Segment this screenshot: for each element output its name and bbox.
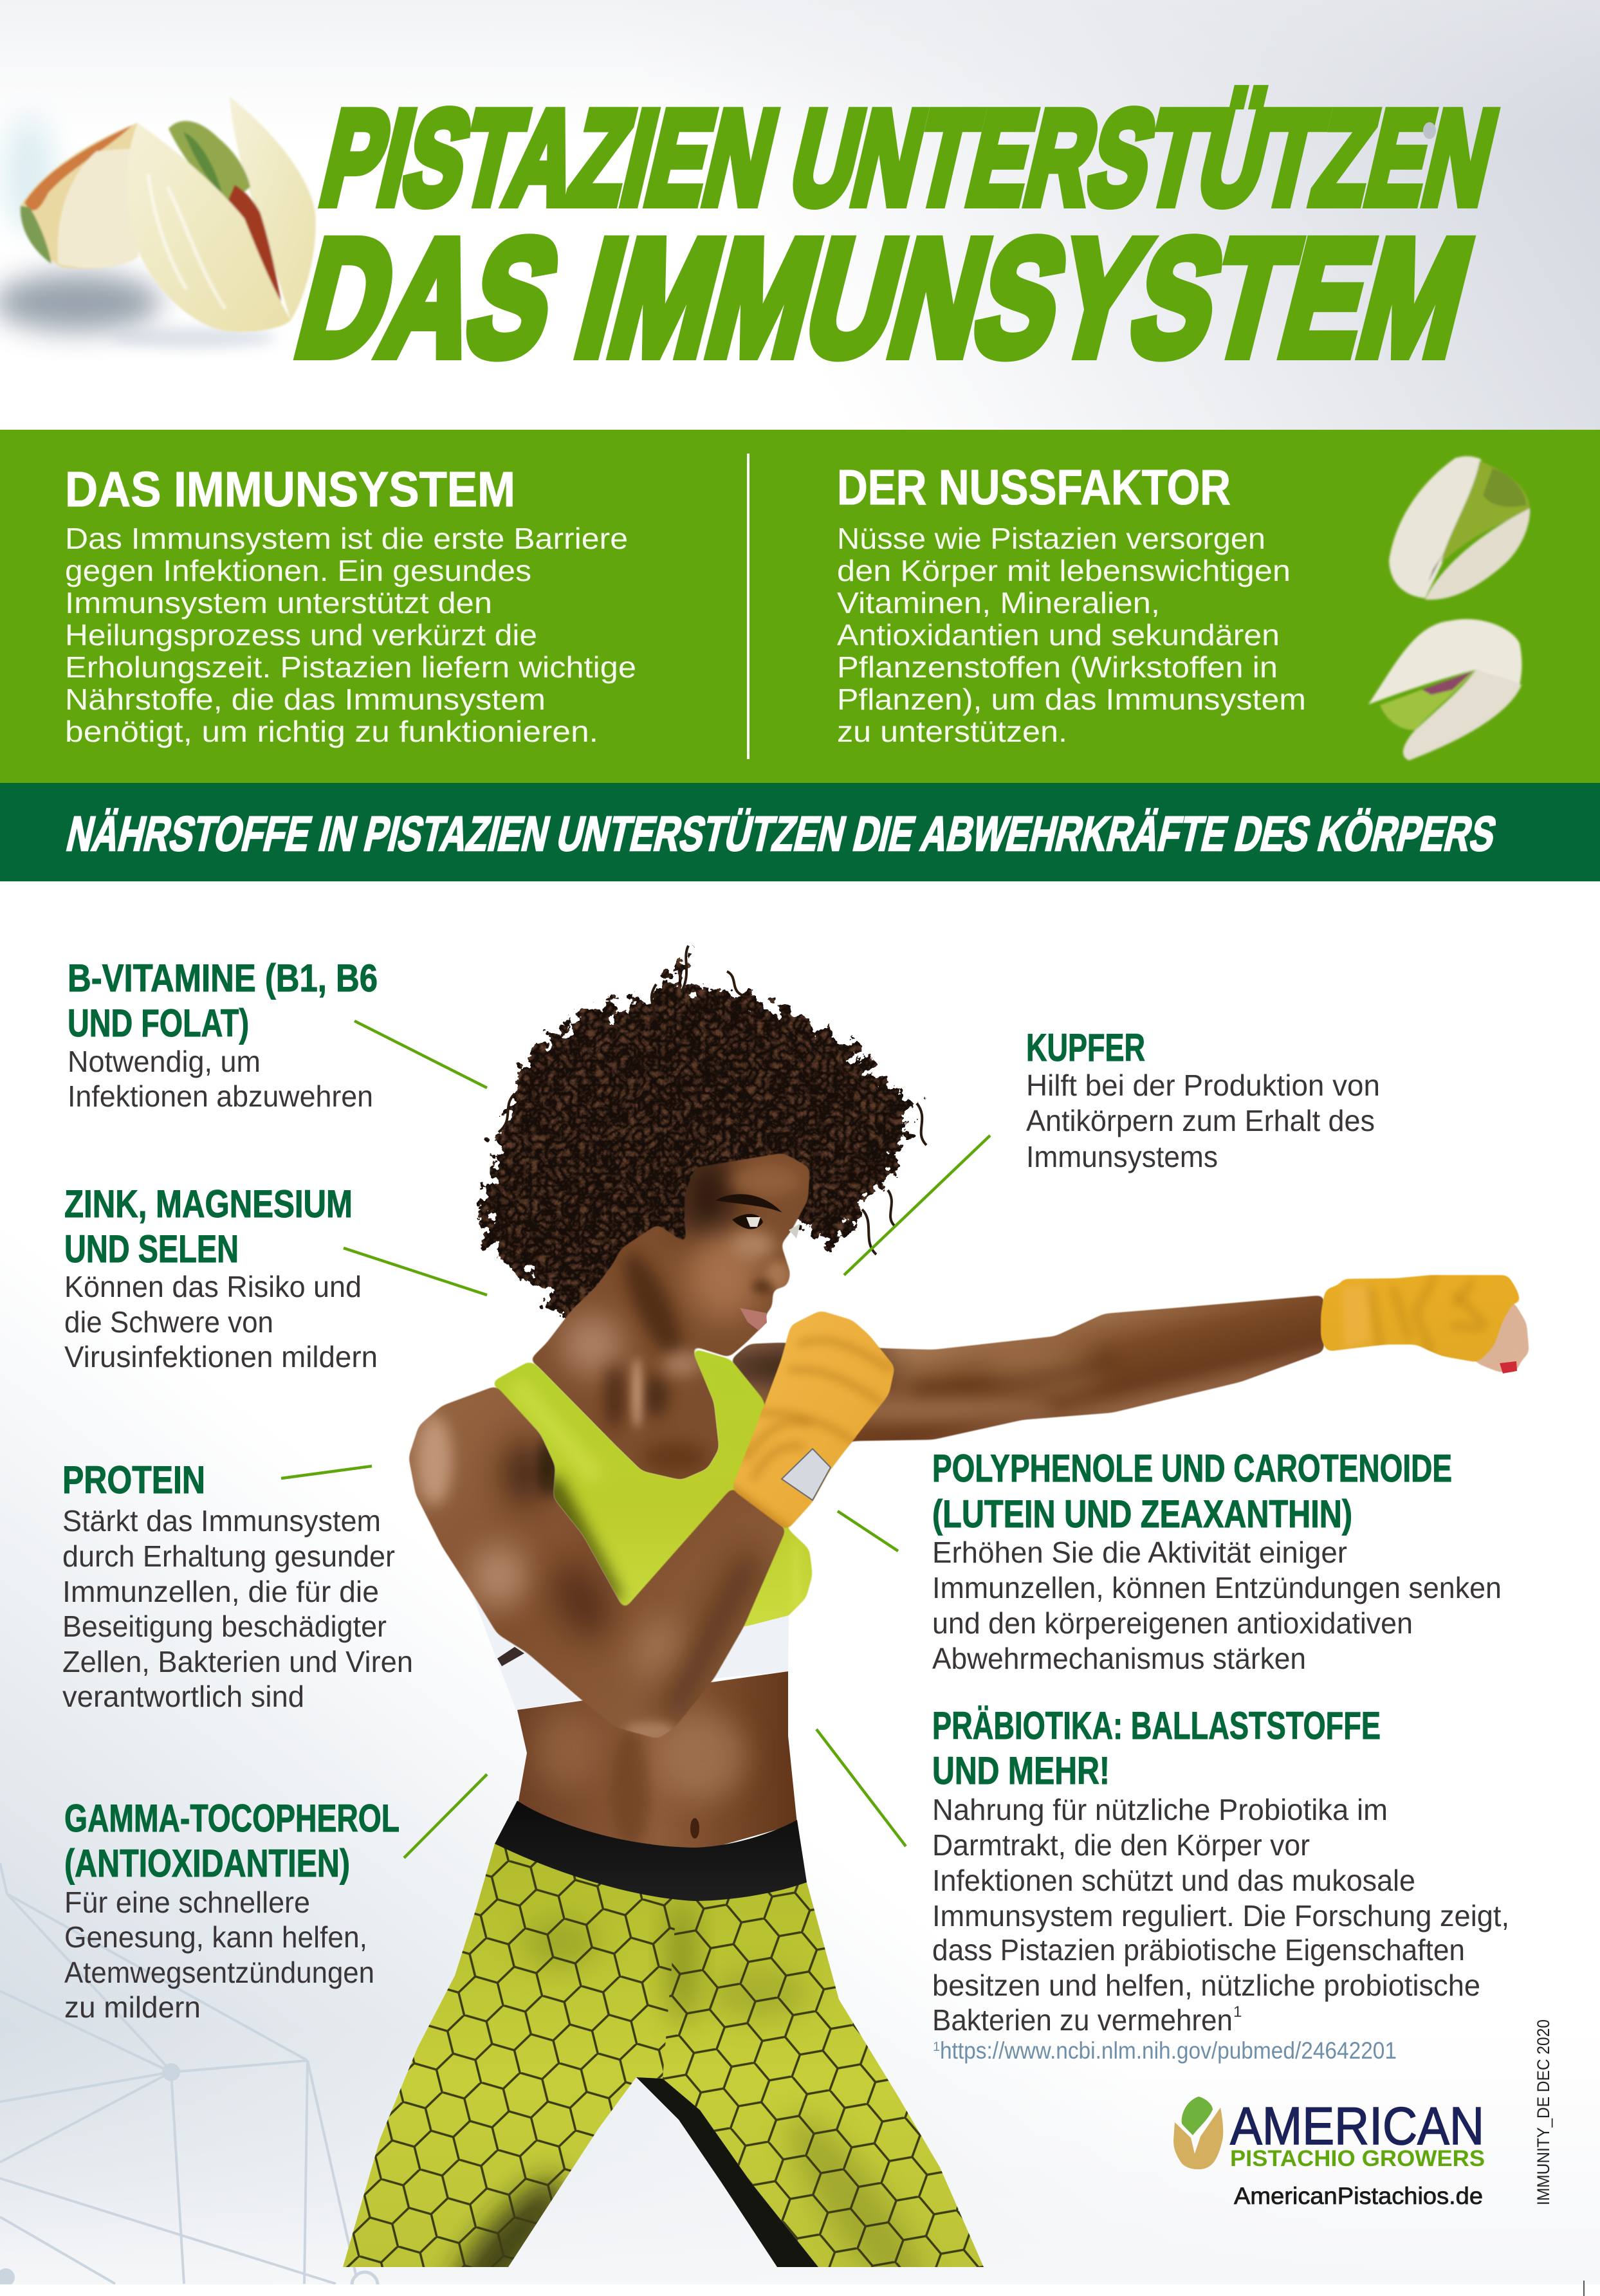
callout: Präbiotika: Nahrung für nützliche Probiotika im (932, 1793, 1388, 1826)
panel text: Das Immunsystem: gegen Infektionen. Ein gesundes (65, 554, 531, 587)
panel text: Der Nussfaktor: Pflanzen), um das Immunsystem (837, 683, 1306, 716)
callout: Gamma-Tocopherol: Atemwegsentzündungen (64, 1956, 374, 1989)
torso (517, 1671, 797, 1853)
callout: Präbiotika: Infektionen schützt und das mukosale (932, 1864, 1415, 1897)
callout: Gamma-Tocopherol: (ANTIOXIDANTIEN) (64, 1842, 350, 1885)
skin (529, 1152, 810, 1480)
panel text: Das Immunsystem: Erholungszeit. Pistazien liefern wichtige (65, 650, 636, 684)
waistband (495, 1801, 807, 1901)
photo: female boxer (322, 946, 1529, 2296)
callout: Zink, Magnesium und Selen: ZINK, MAGNESIUM (64, 1182, 353, 1226)
guard arm (409, 1386, 786, 1740)
leader lines (281, 1021, 990, 1858)
callout: Kupfer (1026, 1026, 1380, 1173)
callout: B-Vitamine: Infektionen abzuwehren (68, 1079, 373, 1113)
callout: Protein (62, 1458, 413, 1713)
fingernail (1500, 1361, 1517, 1373)
callout: Gamma-Tocopherol (64, 1797, 400, 2024)
callout: B-Vitamine: Notwendig, um (68, 1045, 261, 1078)
callout: Präbiotika: dass Pistazien präbiotische Eigenschaften (932, 1933, 1465, 1967)
callout: Zink, Magnesium und Selen (64, 1182, 378, 1373)
callout: Protein: verantwortlich sind (62, 1680, 304, 1713)
panel text: Das Immunsystem: benötigt, um richtig zu funktionieren. (65, 715, 598, 748)
callout: Polyphenole und Carotenoide: Abwehrmechanismus stärken (932, 1642, 1306, 1675)
logo: American Pistachio Growers: AmericanPistachios.de (1234, 2183, 1483, 2209)
callout: Protein: Beseitigung beschädigter (62, 1610, 387, 1643)
callout: Polyphenole und Carotenoide (932, 1447, 1502, 1675)
callout: Protein: Immunzellen, die für die (62, 1575, 379, 1608)
logo: American Pistachio Growers (1173, 2096, 1485, 2209)
callout: Präbiotika: 1 (1233, 2003, 1242, 2021)
pistachio photo: header (0, 96, 316, 348)
callout: Präbiotika: PRÄBIOTIKA: BALLASTSTOFFE (932, 1704, 1381, 1747)
panel text: Der Nussfaktor: Nüsse wie Pistazien versorgen (837, 522, 1265, 555)
icon: pistachio lower (1368, 619, 1522, 760)
inner leg black panel (636, 2077, 818, 2267)
network lines decoration (0, 1863, 378, 2296)
callout: Präbiotika: UND MEHR! (932, 1749, 1110, 1792)
wrap on extended hand (1321, 1275, 1522, 1363)
callout: Präbiotika: Darmtrakt, die den Körper vor (932, 1828, 1310, 1862)
callout: Gamma-Tocopherol: Für eine schnellere (64, 1886, 310, 1919)
title (282, 84, 1509, 390)
callout: Kupfer: Hilft bei der Produktion von (1026, 1069, 1380, 1102)
panel text: Der Nussfaktor: DER NUSSFAKTOR (837, 460, 1231, 515)
logo: American Pistachio Growers: AMERICAN (1230, 2096, 1484, 2156)
wrap on guard hand (732, 1310, 895, 1529)
callout: Zink, Magnesium und Selen: Können das Risiko und (64, 1270, 362, 1303)
panel: green info band (0, 430, 1600, 783)
panel text: Der Nussfaktor: den Körper mit lebenswichtigen (837, 554, 1291, 587)
divider (747, 454, 749, 759)
banner: dark green headline (0, 783, 1600, 881)
callout: B-Vitamine (68, 957, 378, 1113)
callout: Kupfer: KUPFER (1026, 1026, 1145, 1069)
hair (483, 946, 926, 1341)
panel text: Der Nussfaktor: Pflanzenstoffen (Wirkstoffen in (837, 650, 1278, 684)
callout: Kupfer: Antikörpern zum Erhalt des (1026, 1104, 1375, 1137)
callout: Präbiotika: besitzen und helfen, nützliche probiotische (932, 1969, 1480, 2002)
callout: Kupfer: Immunsystems (1026, 1140, 1218, 1173)
panel text: Das Immunsystem: Nährstoffe, die das Immunsystem (65, 683, 546, 716)
footnote: 1 (933, 2040, 940, 2054)
panel text: Das Immunsystem: Das Immunsystem ist die erste Barriere (65, 522, 628, 555)
icon: pistachio upper (1389, 456, 1530, 600)
callout: Zink, Magnesium und Selen: UND SELEN (64, 1227, 239, 1271)
callout: B-Vitamine: B-VITAMINE (B1, B6 (68, 957, 378, 1000)
callout: Präbiotika: Immunsystem reguliert. Die Forschung zeigt, (932, 1899, 1509, 1933)
logo: American Pistachio Growers: PISTACHIO GROWERS (1230, 2146, 1485, 2171)
callout: Polyphenole und Carotenoide: Erhöhen Sie die Aktivität einiger (932, 1536, 1347, 1569)
callout: Polyphenole und Carotenoide: Immunzellen, können Entzündungen senken (932, 1571, 1502, 1604)
icon: logo leaf (1173, 2097, 1223, 2169)
velcro patch (782, 1449, 831, 1500)
callout: Polyphenole und Carotenoide: und den körpereigenen antioxidativen (932, 1606, 1413, 1640)
callout: Protein: PROTEIN (62, 1458, 205, 1502)
callout: B-Vitamine: UND FOLAT) (68, 1002, 249, 1045)
neck and face (529, 1152, 810, 1480)
callout: Protein: Stärkt das Immunsystem (62, 1504, 381, 1538)
panel text: Der Nussfaktor: Vitaminen, Mineralien, (837, 586, 1160, 620)
callout: Protein: Zellen, Bakterien und Viren (62, 1645, 413, 1678)
panel text: Der Nussfaktor (837, 460, 1306, 748)
eye and brow (715, 1194, 800, 1238)
callout: Polyphenole und Carotenoide: (LUTEIN UND ZEAXANTHIN) (932, 1492, 1352, 1536)
white bra band (472, 1592, 789, 1710)
footnote: https://www.ncbi.nlm.nih.gov/pubmed/24642201 (940, 2037, 1397, 2064)
tank top (491, 1348, 813, 1627)
code label vertical: IMMUNITY_DE DEC 2020 (1534, 2019, 1553, 2205)
callout: Protein: durch Erhaltung gesunder (62, 1539, 395, 1573)
callout: Präbiotika (932, 1704, 1509, 2037)
callout: Zink, Magnesium und Selen: die Schwere von (64, 1305, 273, 1339)
fist (1460, 1301, 1529, 1372)
panel text: Das Immunsystem: DAS IMMUNSYSTEM (65, 462, 515, 517)
callout: Polyphenole und Carotenoide: POLYPHENOLE UND CAROTENOIDE (932, 1447, 1452, 1490)
panel text: Das Immunsystem: Immunsystem unterstützt den (65, 586, 492, 620)
callout: Gamma-Tocopherol: zu mildern (64, 1990, 201, 2024)
callout: Präbiotika: Bakterien zu vermehren (932, 2003, 1233, 2037)
callout: Zink, Magnesium und Selen: Virusinfektionen mildern (64, 1340, 378, 1373)
extended arm (714, 1295, 1324, 1454)
panel text: Der Nussfaktor: Antioxidantien und sekundären (837, 618, 1280, 652)
callout: Gamma-Tocopherol: GAMMA-TOCOPHEROL (64, 1797, 400, 1840)
leggings (343, 1844, 984, 2267)
panel text: Das Immunsystem (65, 462, 636, 748)
lips (740, 1308, 767, 1330)
panel text: Das Immunsystem: Heilungsprozess und verkürzt die (65, 618, 537, 652)
callout: Gamma-Tocopherol: Genesung, kann helfen, (64, 1920, 367, 1954)
panel text: Der Nussfaktor: zu unterstützen. (837, 715, 1067, 748)
